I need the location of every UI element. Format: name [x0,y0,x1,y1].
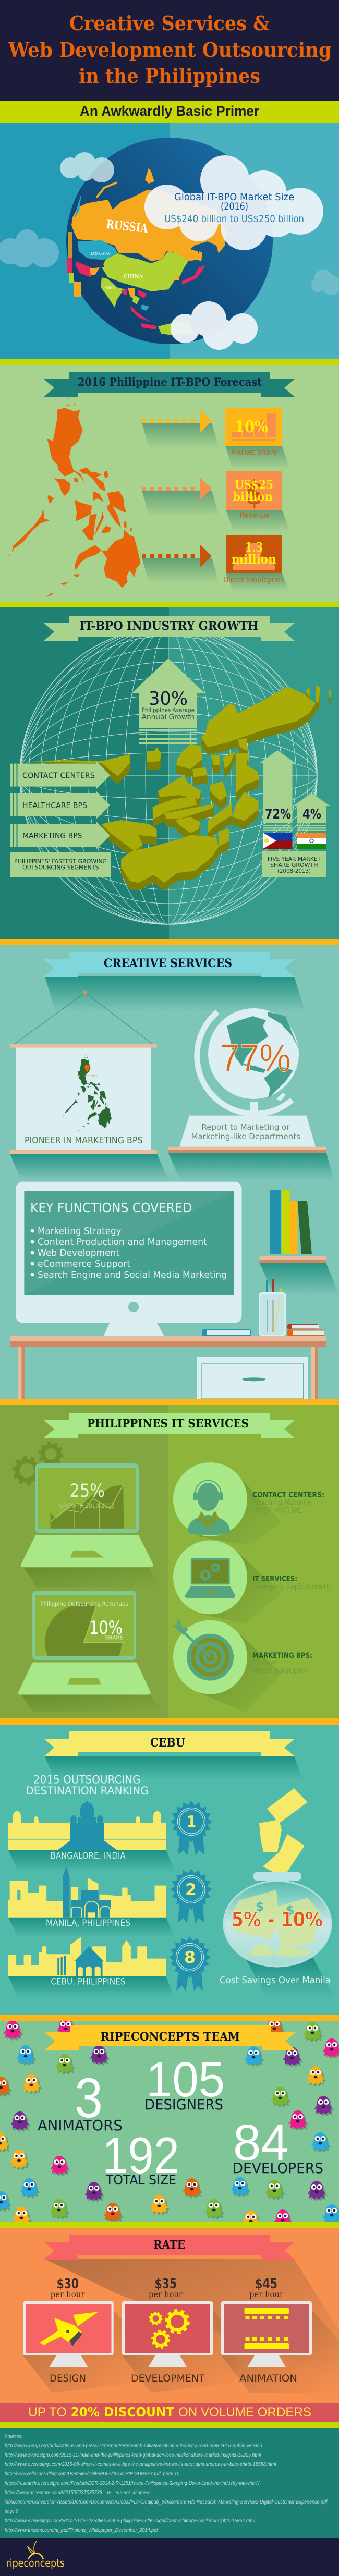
text: marketing BPS [252,1652,312,1676]
laptop: 10% revenue share pie: SHARE [105,1634,123,1641]
stat: revenue: billion [233,489,273,504]
panel: footer [0,2538,339,2576]
banner: forecast: 2016 Philippine IT-BPO Forecast [78,375,262,388]
map: small Philippines [63,1055,112,1132]
rate: animation: per hour [249,2289,283,2299]
banner: rate: RATE [153,2238,185,2252]
title: Creative Services & [69,11,270,35]
IT services: laptop icon [173,1540,282,1624]
panel: industry growth [0,607,339,939]
title [8,11,332,88]
list: key functions [30,1226,227,1280]
land: Kazakhstan [78,240,118,261]
heading: destination ranking [26,1774,149,1797]
divider band [0,1718,339,1725]
text: marketing BPS: MOST NASCENT [252,1667,307,1676]
icon: gears [150,2310,189,2348]
tag: marketing bps: MARKETING BPS [22,831,82,840]
tag: healthcare bps: HEALTHCARE BPS [22,801,87,810]
banner: industry growth: IT-BPO INDUSTRY GROWTH [79,619,258,633]
badge: rank 2: 2 [185,1881,197,1899]
panel: sources: http://www.ibpap.org/publications-and-press-statements/research-initiatives/it-bpm-industry-road-map-2016-public-version [5,2443,262,2449]
rate: animation: ANIMATION [239,2373,297,2384]
rate: development [122,2276,235,2393]
arrow: market share [142,410,219,448]
logo: ripeconcepts [6,2541,65,2569]
arrow: 30% annual growth: Annual Growth [142,713,195,722]
flag: Philippines [263,833,292,849]
caption: fastest growing segments [10,852,111,877]
caption: five year share growth: (2008-2013) [277,868,311,874]
rate: animation: $45 [255,2276,277,2292]
stat: designers: 105 [146,2052,225,2107]
laptop: 10% revenue share pie [18,1591,162,1712]
arrow: 30% annual growth: Philippines Average [142,707,195,713]
text: marketing BPS: Pioneer [252,1659,277,1667]
panel: sources: http://www.cellaconsulting.com/UserFiles/Cella/PDFs/2014-IHIR-SURVEY.pdf, page 10 [5,2471,179,2477]
stat: market share: Market Share [231,447,277,457]
monster crowd [0,2018,339,2231]
arrow: revenue [142,478,219,516]
divider band [0,939,339,945]
land: China: CHINA [124,273,143,280]
icon: location pin [84,1065,90,1072]
stat: animators [38,2066,123,2134]
poster: pioneer in marketing: PIONEER IN MARKETING BPS [25,1135,143,1146]
banner: creative services [44,952,305,1011]
panel: IT services [0,1405,339,1718]
banner: IT services [44,1413,295,1438]
land: Kazakhstan: KAZAKHSTAN [91,251,110,256]
subtitle band [0,101,339,123]
divider band [0,1399,339,1405]
banner: industry growth [44,616,295,641]
cloud: left background [0,229,59,267]
stat: market share [225,408,290,469]
panel: sources: http://www.tholons.com/nl_pdf/Tholons_Whitepaper_December_2014.pdf [5,2528,159,2533]
skyline: Cebu [8,1937,174,1998]
arrow: India 4%: 4% [302,807,321,822]
jar with 5-10% savings: Cost Savings Over Manila [220,1975,331,1986]
banner: creative services: CREATIVE SERVICES [104,957,232,970]
cloud: top-left small [60,152,114,182]
stat: direct employees [223,535,290,592]
text: contact centers: Reaching Maturity [252,1498,311,1507]
land: other Asian countries [67,194,205,335]
land: Russia [71,168,227,262]
monitor: key functions [16,1182,242,1336]
tag: marketing bps [10,822,110,849]
skyline: Bangalore: BANGALORE, INDIA [51,1851,126,1861]
icon: pen nib and brush [40,2312,99,2346]
cloud: right background [311,270,339,295]
caption: five year share growth: FIVE YEAR MARKET [268,856,321,862]
panel: sources: https://research.everestgrp.com/Product/EGR-2014-2-R-1251/Is-the-Philippines-Stepping-Up-to-Lead-the-Industry-into-the-N [5,2481,260,2486]
stat: revenue: Revenue [240,510,270,520]
discount band: ON VOLUME ORDERS [178,2405,311,2420]
logo: ripeconcepts: ripeconcepts [6,2557,65,2569]
pencil cup [260,1279,285,1336]
poster: pioneer in marketing: PHILIPPINES [77,1075,98,1078]
tag: healthcare bps [10,791,110,819]
title: in the Philippines [79,64,260,88]
discount band [0,2403,339,2422]
panel: sources: http://www.everestgrp.com/2015-11-india-and-the-philippines-lead-global-services-market-share-market-insights-19225.html [5,2452,261,2458]
divider band [0,602,339,607]
desk globe: 77% [168,1008,334,1180]
map: 3D Philippines [28,686,331,891]
panel: sources: https://www.accenture.com/t20150523T033736__w__/us-en/_acnmed- [5,2490,151,2496]
text: contact centers [252,1491,324,1515]
stat: revenue: $ [245,473,264,511]
rate: development: per hour [149,2289,183,2299]
land: Russia: RUSSIA [105,217,149,236]
tag: contact centers: CONTACT CENTERS [22,771,95,780]
list: key functions: Content Production and Management [38,1237,207,1248]
poster: pioneer in marketing [10,991,168,1180]
panel: title header [0,0,339,101]
divider band [0,2222,339,2228]
cloud: bottom [171,301,258,350]
caption: five year share growth [262,851,326,877]
skyline: Manila [8,1866,174,1937]
arrow: India 4% [293,793,330,831]
list: key functions: Marketing Strategy [38,1226,122,1237]
text: marketing BPS: MARKETING BPS: [252,1652,312,1660]
heading: destination ranking: DESTINATION RANKING [26,1785,149,1797]
contact centers: headset icon [173,1462,282,1546]
stat: market share: 10% [235,418,268,436]
stat: revenue [226,471,290,532]
cloud callout: global market size: Global IT-BPO Market Size [174,191,294,203]
rate: animation [221,2276,339,2393]
subtitle band: An Awkwardly Basic Primer [80,103,259,119]
banner: Cebu [44,1731,302,1779]
banner: team [45,2025,296,2050]
panel: sources: http://www.everestgrp.com/2015-08-when-it-comes-to-it-bps-the-philippines-knows-its-strengths-sherpas-in-blue-shirts-18588.html [5,2462,276,2468]
panel: sources: http://www.everestgrp.com/2014-10-tier-23-cities-in-the-philippines-offer-significant-arbitrage-market-insights-15852.html [5,2518,256,2524]
arrow: Philippines 72%: 72% [265,807,291,822]
panel: sources: Sources: [5,2434,22,2440]
icon: gears [14,1443,62,1484]
laptop: 25% growth chart: 25% [70,1481,105,1501]
shelf with books [260,1190,339,1295]
banner: rate [44,2235,295,2260]
caption: fastest growing segments: PHILIPPINES' FASTEST GROWING [14,858,107,865]
skyline: Bangalore [8,1801,175,1872]
discount band: UP TO [28,2405,67,2420]
banner: forecast [44,372,295,397]
stat: total size: TOTAL SIZE [105,2172,176,2188]
stat: animators: 3 [75,2066,103,2129]
cloud callout: global market size [144,155,323,250]
text: IT services: IT SERVICES: [252,1575,297,1583]
panel: Ripeconcepts team [0,2018,339,2231]
flag: India [297,833,326,849]
map: Philippines orange [9,398,140,597]
jar with 5-10% savings [220,1872,334,1997]
falling money bills [0,1517,339,1872]
discount band: 20% DISCOUNT [71,2404,174,2420]
panel: sources: page 9 [4,2509,18,2514]
arrow: 30% annual growth [131,658,205,744]
rate: design: DESIGN [50,2373,86,2384]
wire globe [20,627,317,924]
panel: sources [0,2428,339,2538]
stat: direct employees: Direct Employees [223,575,284,584]
arrow: 30% annual growth: 30% [149,688,188,710]
cloud callout: global market size: (2016) [221,201,248,212]
stat: animators: ANIMATORS [38,2117,123,2134]
caption: five year share growth: SHARE GROWTH [270,862,318,869]
icon: film strip [244,2308,289,2349]
banner: IT services: PHILIPPINES IT SERVICES [87,1417,249,1431]
arrow: Philippines 72% [259,750,296,831]
stat: developers [233,2114,323,2177]
jar with 5-10% savings: 5% - 10% [232,1908,323,1931]
banner: team: RIPECONCEPTS TEAM [101,2030,240,2044]
panel: 2016 forecast [0,365,339,602]
arrow: direct employees [142,545,219,583]
divider band [0,2015,339,2021]
list: key functions: Web Development [38,1248,119,1259]
badge: rank 8: 8 [184,1948,196,1967]
heading: destination ranking: 2015 OUTSOURCING [33,1774,141,1786]
stat: developers: 84 [233,2114,289,2171]
jar with 5-10% savings: $ [286,1903,295,1918]
rate: development: $35 [154,2276,177,2292]
laptop: 25% growth chart [21,1463,162,1588]
list: key functions: eCommerce Support [38,1259,130,1269]
rate: design: per hour [51,2289,85,2299]
laptop: 25% growth chart: GROWTH 2010-2015 [59,1502,115,1509]
panel: rate [0,2228,339,2403]
text: contact centers: CONTACT CENTERS: [252,1491,324,1499]
badge: rank 1: 1 [187,1813,196,1832]
land: China [102,252,188,291]
desk globe: 77%: 77% [220,1036,291,1080]
rate: design: $30 [57,2276,79,2292]
text: IT services [252,1575,331,1591]
skyline: Cebu: CEBU, PHILIPPINES [51,1977,125,1987]
badge: rank 2 [170,1869,212,1923]
badge: rank 8 [169,1936,211,1991]
jar with 5-10% savings: $ [256,1899,264,1914]
divider band [0,2422,339,2428]
stat: total size: 192 [102,2127,179,2184]
panel: creative services [0,945,339,1399]
tag: contact centers [10,761,110,789]
skyline: Manila: MANILA, PHILIPPINES [46,1918,130,1928]
text: IT services: Emerging Rapid Growth [252,1583,331,1591]
laptop: 10% revenue share pie: Philippine Outsourcing Revenues [41,1600,128,1608]
rate: design [23,2276,136,2393]
stat: direct employees: 1.3 [245,540,263,555]
panel: global market size [0,123,339,359]
badge: rank 1 [171,1801,212,1855]
list: key functions: Search Engine and Social Media Marketing [38,1270,227,1280]
marketing BPS: target icon [172,1618,282,1713]
land: India [101,277,125,308]
cloud callout: global market size: US$240 billion to US$250 billion [164,213,304,225]
desk globe: 77%: Report to Marketing or [201,1122,290,1132]
land: India: INDIA [104,286,115,290]
monitor: key functions: KEY FUNCTIONS COVERED [30,1200,192,1215]
globe with Asia map [66,138,273,344]
stat: revenue: US$25 [235,477,273,492]
stat: designers: DESIGNERS [144,2096,223,2113]
stat: developers: DEVELOPERS [233,2159,323,2177]
banner shadow [45,2259,339,2377]
caption: fastest growing segments: OUTSOURCING SEGMENTS [22,863,99,871]
stat: direct employees: million [232,552,276,567]
text: contact centers: MOST MATURE [252,1507,302,1515]
laptop: 10% revenue share pie: 10% [89,1618,123,1639]
desk [10,1336,326,1399]
rate: development: DEVELOPMENT [131,2373,205,2384]
divider band [0,359,339,365]
books on desk [202,1324,324,1336]
banner: Cebu: CEBU [150,1736,185,1750]
panel: Cebu [0,1517,339,2015]
desk globe: 77%: Marketing-like Departments [191,1132,300,1141]
